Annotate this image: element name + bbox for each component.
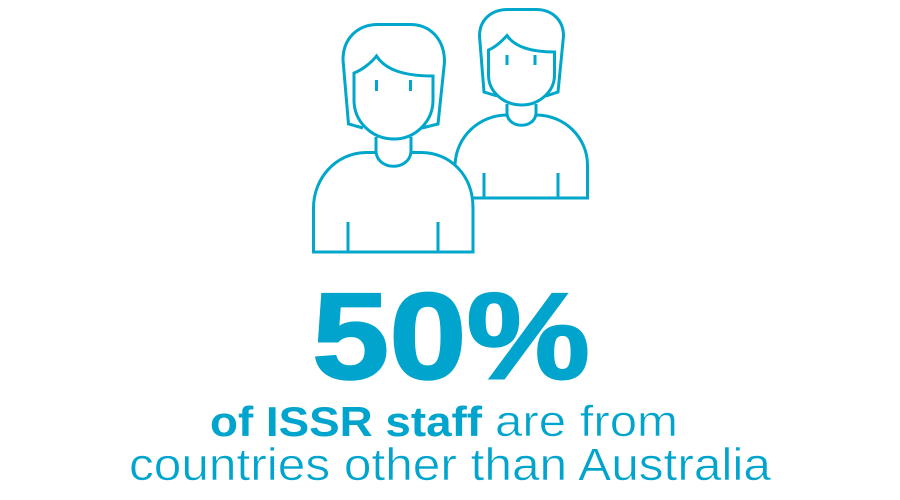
caption <box>129 397 772 490</box>
caption: line one bold: of ISSR staff <box>210 398 483 445</box>
headline: 50%: 50% <box>312 268 590 406</box>
icon: front person <box>314 24 473 252</box>
caption: line one regular: are from <box>495 397 678 446</box>
icon: two people <box>314 10 588 252</box>
caption: line two: countries other than Australia <box>129 439 772 490</box>
icon: rear person <box>455 10 588 198</box>
